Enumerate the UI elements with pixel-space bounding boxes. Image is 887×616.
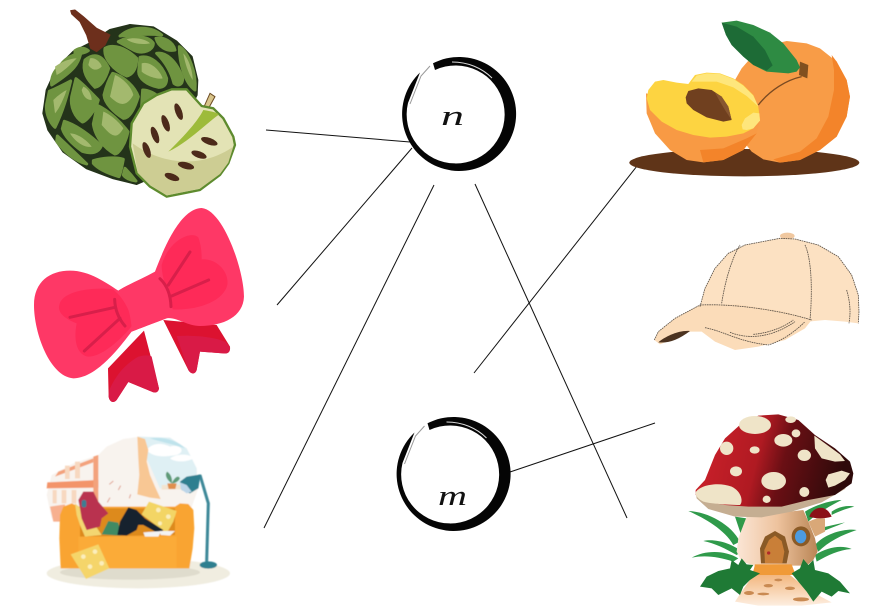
window bbox=[792, 526, 810, 546]
woman bbox=[102, 521, 121, 536]
front grass bbox=[700, 558, 760, 595]
tails bbox=[108, 331, 159, 402]
mushroom underside bbox=[696, 473, 853, 517]
circle n bbox=[402, 57, 516, 171]
icon: pink bow bbox=[34, 208, 244, 402]
icon: apricot bbox=[629, 21, 859, 176]
floor shadow bbox=[47, 558, 230, 588]
garden path bbox=[735, 575, 832, 606]
icon: woman relaxing on sofa bbox=[47, 437, 230, 588]
sofa bbox=[59, 503, 194, 568]
small side mushroom bbox=[808, 518, 825, 537]
circle m bbox=[397, 417, 511, 531]
knot bbox=[118, 277, 172, 332]
plant bbox=[162, 484, 197, 490]
back grass bbox=[688, 500, 857, 562]
stem bbox=[71, 10, 110, 52]
curtain bbox=[137, 437, 161, 499]
room backdrop bbox=[47, 437, 198, 518]
stone bbox=[686, 88, 732, 122]
floor lamp bbox=[200, 475, 208, 562]
bookshelf bbox=[47, 480, 98, 488]
yellow cushions bbox=[75, 503, 102, 537]
steps bbox=[752, 564, 796, 575]
music notes bbox=[107, 481, 131, 502]
door bbox=[760, 531, 789, 563]
ground shadow bbox=[629, 149, 859, 176]
slice bbox=[203, 93, 215, 110]
cap spots bbox=[696, 416, 850, 505]
stem bbox=[737, 510, 818, 566]
whole fruit bbox=[735, 41, 850, 163]
letter n: n bbox=[441, 101, 464, 132]
icon: custard apple bbox=[43, 10, 235, 197]
under-brim bbox=[658, 331, 690, 342]
icon: mushroom house bbox=[688, 414, 857, 606]
stalk bbox=[758, 77, 802, 105]
halved fruit bbox=[646, 93, 761, 162]
icon: baseball cap bbox=[654, 233, 859, 350]
connector lines bbox=[264, 130, 655, 528]
letter m: m bbox=[438, 481, 467, 512]
mushroom cap bbox=[696, 414, 853, 507]
loops bbox=[34, 208, 244, 378]
leaf bbox=[722, 21, 800, 73]
